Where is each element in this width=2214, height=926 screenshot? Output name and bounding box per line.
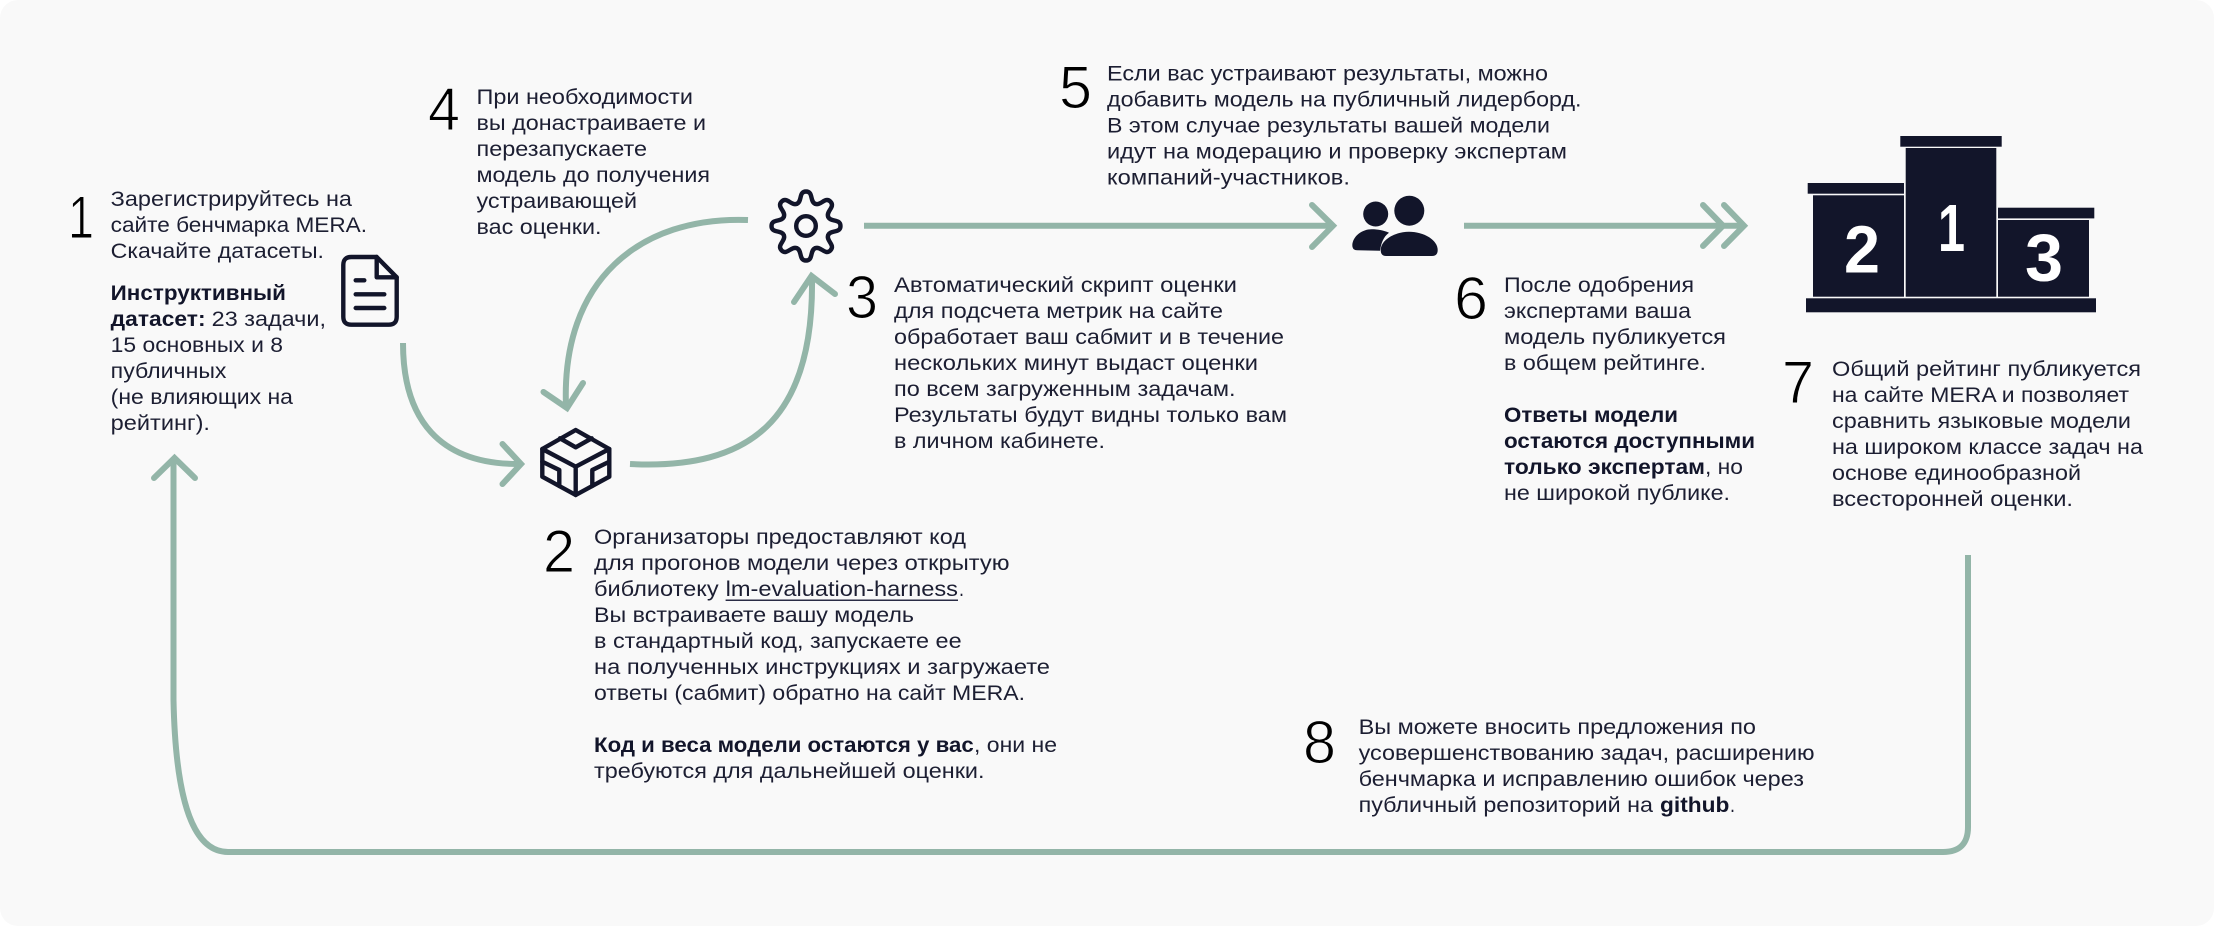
icon: cube [542, 430, 609, 495]
step 5 text: добавить модель на публичный лидерборд. [1107, 88, 1582, 112]
step 2 text: ответы (сабмит) обратно на сайт MERA. [594, 682, 1025, 705]
number 1: 1 [68, 184, 94, 251]
step 8 text: Вы можете вносить предложения по [1359, 716, 1756, 739]
step 7 text: сравнить языковые модели [1832, 410, 2131, 433]
step 1 text [111, 188, 367, 435]
step 1 text: Инструктивный [111, 282, 286, 305]
step 6 text [1504, 274, 1755, 505]
step 7 text: Общий рейтинг публикуется [1832, 358, 2141, 381]
step 7 text: на широком классе задач на [1832, 436, 2143, 459]
step 1 text: Зарегистрируйтесь на [111, 188, 352, 211]
number 6: 6 [1454, 265, 1488, 332]
step 3 text: для подсчета метрик на сайте [894, 300, 1223, 323]
arrow: return loop from step 7 to step 1 [154, 458, 1968, 852]
step 1 text: 15 основных и 8 [111, 334, 283, 357]
step 8 text: бенчмарка и исправлению ошибок через [1359, 768, 1804, 791]
icon: podium: 2 [1844, 213, 1880, 288]
step 8 text: . [1730, 794, 1735, 817]
arrow: experts to podium [1464, 205, 1744, 246]
step 1 text: (не влияющих на [111, 386, 293, 409]
step 3 text: по всем загруженным задачам. [894, 378, 1236, 401]
number 2: 2 [543, 518, 575, 585]
step 6 text: остаются доступными [1504, 430, 1755, 453]
step 6 text: только экспертам [1504, 456, 1705, 479]
step 8 text: публичный репозиторий на [1359, 794, 1653, 817]
step 2 text: . [959, 578, 964, 601]
step 2 text: требуются для дальнейшей оценки. [594, 760, 984, 783]
step 7 text [1832, 358, 2143, 511]
step 2 text [594, 526, 1057, 783]
step 5 text: компаний-участников. [1107, 166, 1350, 190]
step 7 text: на сайте MERA и позволяет [1832, 384, 2129, 407]
step 7 text: всесторонней оценки. [1832, 488, 2073, 511]
step 3 text: Автоматический скрипт оценки [894, 274, 1237, 297]
step 1 text: сайте бенчмарка MERA. [111, 214, 367, 237]
step 2 text: библиотеку [594, 578, 719, 601]
step 3 text [894, 274, 1287, 453]
step 6 text: экспертами ваша [1504, 300, 1691, 323]
step 3 text: обработает ваш сабмит и в течение [894, 326, 1284, 349]
step 4 text: При необходимости [476, 86, 693, 109]
step 8 text: github [1660, 794, 1729, 817]
step 4 [428, 76, 710, 239]
step 1 text: публичных [111, 360, 227, 383]
icon: document [343, 257, 397, 325]
step 2 text: Код и веса модели остаются у вас [594, 734, 974, 757]
step 5 text: В этом случае результаты вашей модели [1107, 114, 1550, 138]
step 7 [1782, 349, 2143, 511]
arrow: gear back to cube [544, 220, 748, 408]
step 6 text: Ответы модели [1504, 404, 1678, 427]
step 6 text: модель публикуется [1504, 326, 1726, 349]
number 8: 8 [1303, 709, 1336, 776]
step 4 text: устраивающей [476, 190, 637, 213]
arrow: cube to gear [630, 276, 835, 464]
step 6 text: После одобрения [1504, 274, 1694, 297]
step 6 text: не широкой публике. [1504, 482, 1730, 505]
number 4: 4 [428, 76, 460, 143]
step 1 text: 23 задачи, [212, 308, 326, 331]
step 5 [1059, 54, 1582, 190]
step 4 text: вы донастраиваете и [476, 112, 706, 135]
icon: podium: 3 [2025, 221, 2063, 296]
step 3 text: нескольких минут выдаст оценки [894, 352, 1258, 375]
arrow: document to cube [403, 343, 521, 484]
step 5 text: Если вас устраивают результаты, можно [1107, 62, 1548, 86]
icon: experts [1352, 196, 1438, 256]
icon: podium [1806, 136, 2096, 312]
step 8 [1303, 709, 1815, 817]
step 2 [543, 518, 1057, 783]
step 5 text [1107, 62, 1582, 190]
step 4 text: перезапускаете [476, 138, 647, 161]
step 8 text [1359, 716, 1815, 817]
step 2 text: Вы встраиваете вашу модель [594, 604, 914, 627]
step 4 text: вас оценки. [476, 216, 602, 239]
step 5 text: идут на модерацию и проверку экспертам [1107, 140, 1567, 164]
step 2 text: на полученных инструкциях и загружаете [594, 656, 1050, 679]
link: lm-evaluation-harness: lm-evaluation-harness [726, 578, 958, 601]
step 1 text: рейтинг). [111, 412, 210, 435]
step 3 text: в личном кабинете. [894, 430, 1105, 453]
step 6 text: , но [1705, 456, 1743, 479]
icon: podium: 1 [1938, 191, 1965, 266]
number 3: 3 [846, 264, 878, 331]
step 4 text: модель до получения [476, 164, 710, 187]
arrow: gear to experts [864, 205, 1333, 247]
number 5: 5 [1059, 54, 1092, 121]
step 2 text: , они не [974, 734, 1057, 757]
step 2 text: Организаторы предоставляют код [594, 526, 966, 549]
step 1 text: Скачайте датасеты. [111, 240, 324, 263]
step 2 text: для прогонов модели через открытую [594, 552, 1010, 575]
step 6 [1454, 265, 1755, 505]
step 4 text [476, 86, 710, 239]
step 3 [846, 264, 1287, 453]
step 2 text: в стандартный код, запускаете ее [594, 630, 962, 653]
number 7: 7 [1782, 349, 1814, 416]
step 7 text: основе единообразной [1832, 462, 2081, 485]
step 1 text: датасет: [111, 308, 206, 331]
step 8 text: усовершенствованию задач, расширению [1359, 742, 1815, 765]
step 6 text: в общем рейтинге. [1504, 352, 1706, 375]
step 3 text: Результаты будут видны только вам [894, 404, 1287, 427]
step 1 [68, 184, 367, 435]
icon: gear [772, 192, 840, 260]
